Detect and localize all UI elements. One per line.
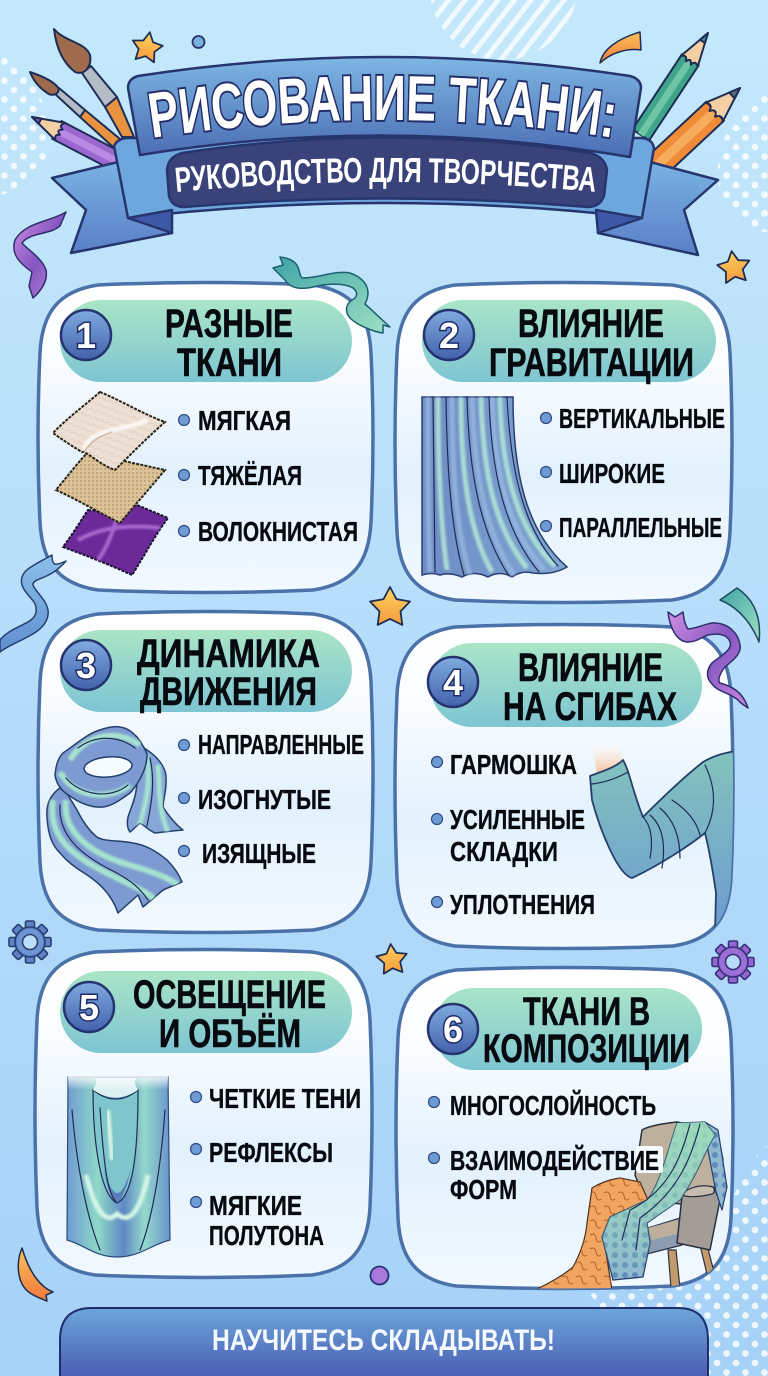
bullet list 6: МНОГОСЛОЙНОСТЬ xyxy=(450,1089,656,1121)
bullet list 6 xyxy=(428,1089,659,1205)
panel 1: types of fabric xyxy=(38,282,373,592)
label backing: white halo xyxy=(636,1146,663,1173)
number badge 5: 5 xyxy=(79,987,99,1028)
stripes circle xyxy=(431,0,576,60)
number badge 3: 3 xyxy=(76,645,96,686)
bullet list 4 xyxy=(432,749,595,920)
number badge 6: 6 xyxy=(443,1009,463,1050)
gear: blue xyxy=(9,921,51,963)
brush: small xyxy=(30,72,120,147)
dot: bottom purple xyxy=(370,1266,388,1284)
bullet list 3: ИЗОГНУТЫЕ xyxy=(198,784,331,815)
banner: fold left xyxy=(128,210,172,233)
bullet list 5: ЧЕТКИЕ ТЕНИ xyxy=(209,1083,361,1114)
bullet list 1 xyxy=(178,405,358,547)
bullet list 5 xyxy=(190,1083,361,1251)
number badge 2 xyxy=(424,310,474,360)
heading 1 xyxy=(165,302,293,385)
heading 4: ВЛИЯНИЕ xyxy=(518,646,663,690)
heading 2: ГРАВИТАЦИИ xyxy=(489,341,694,385)
number badge 1: 1 xyxy=(76,315,96,356)
heading band 5 xyxy=(60,971,352,1053)
dots pattern: left xyxy=(0,50,49,195)
bullet list 3 xyxy=(178,729,364,869)
heading band 3 xyxy=(60,630,352,712)
number badge 2: 2 xyxy=(439,315,459,356)
dot: top blue xyxy=(192,36,204,48)
heading 3: ДИНАМИКА xyxy=(137,632,320,676)
heading band 6 xyxy=(433,988,702,1070)
bullet list 3: НАПРАВЛЕННЫЕ xyxy=(198,729,364,760)
heading 6: КОМПОЗИЦИИ xyxy=(483,1027,690,1071)
number badge 4: 4 xyxy=(443,662,463,703)
number badge 6 xyxy=(428,1004,478,1054)
panel 2: gravity xyxy=(395,282,732,602)
heading 1: ТКАНИ xyxy=(177,341,282,385)
star: center xyxy=(370,587,410,625)
number badge 5 xyxy=(64,982,114,1032)
heading 2: ВЛИЯНИЕ xyxy=(518,302,664,346)
heading 5 xyxy=(133,973,326,1056)
banner: ribbon tail left xyxy=(52,162,172,253)
bullet list 6: ВЗАИМОДЕЙСТВИЕ xyxy=(450,1144,659,1176)
subtitle: РУКОВОДСТВО ДЛЯ ТВОРЧЕСТВА xyxy=(175,158,595,192)
ribbon: purple right xyxy=(668,612,748,708)
star: lower center xyxy=(375,943,408,974)
ribbon: purple left xyxy=(14,212,66,298)
bullet list 6: ФОРМ xyxy=(450,1174,517,1205)
banner: main band xyxy=(128,57,641,157)
panel 5: lighting and volume xyxy=(35,950,372,1278)
panel 6: fabric in composition xyxy=(396,968,733,1290)
crescent: teal right xyxy=(720,588,760,642)
dots pattern: bottom right xyxy=(585,1145,768,1376)
number badge 3 xyxy=(61,640,111,690)
dots pattern: right xyxy=(718,85,768,232)
heading band 4 xyxy=(430,643,702,727)
bullet list 1: ТЯЖЁЛАЯ xyxy=(198,460,302,491)
illustration: draped cloth xyxy=(67,1076,170,1257)
heading 4 xyxy=(503,646,677,729)
pencil: green xyxy=(632,27,716,140)
brush: large xyxy=(54,29,134,137)
heading 5: И ОБЪЁМ xyxy=(159,1012,301,1056)
number badge 1 xyxy=(61,310,111,360)
bullet list 2 xyxy=(540,403,725,543)
illustration: arm with sleeve xyxy=(589,749,733,927)
banner: subtitle band xyxy=(167,138,607,207)
heading 5: ОСВЕЩЕНИЕ xyxy=(133,973,326,1017)
panel 3: motion dynamics xyxy=(38,612,373,932)
crescent: top orange xyxy=(600,32,641,63)
bullet list 1: ВОЛОКНИСТАЯ xyxy=(198,516,358,547)
footer text: НАУЧИТЕСЬ СКЛАДЫВАТЬ! xyxy=(212,1324,555,1357)
star: top left xyxy=(130,30,165,63)
bullet list 4: УСИЛЕННЫЕ xyxy=(450,804,585,835)
heading 1: РАЗНЫЕ xyxy=(165,302,293,346)
banner: fold right xyxy=(596,210,642,233)
pencil: orange xyxy=(646,78,749,177)
pencil: purple xyxy=(27,108,121,170)
heading 2 xyxy=(489,302,694,385)
heading 3: ДВИЖЕНИЯ xyxy=(140,670,317,714)
title: РИСОВАНИЕ ТКАНИ: xyxy=(147,74,616,140)
illustration: fabric swatches xyxy=(53,392,168,575)
bullet list 5: ПОЛУТОНА xyxy=(209,1220,324,1251)
illustration: armchair with throws xyxy=(535,1122,727,1290)
bullet list 2: ШИРОКИЕ xyxy=(559,458,665,489)
bullet list 4: УПЛОТНЕНИЯ xyxy=(450,889,595,920)
footer banner xyxy=(60,1308,708,1376)
banner: ribbon tail right xyxy=(598,162,718,255)
illustration: scarf xyxy=(47,727,183,913)
banner: lower ribbon xyxy=(114,138,654,218)
bullet list 5: МЯГКИЕ xyxy=(209,1190,302,1221)
gear: purple xyxy=(712,941,754,983)
heading 6 xyxy=(483,990,690,1071)
heading band 2 xyxy=(422,300,716,382)
star: top right xyxy=(716,249,752,284)
bullet list 4: ГАРМОШКА xyxy=(450,749,577,780)
number badge 4 xyxy=(428,657,478,707)
heading 6: ТКАНИ В xyxy=(523,990,650,1034)
crescent: bottom left orange xyxy=(18,1248,53,1301)
panel 4: folds xyxy=(395,624,735,950)
bullet list 5: РЕФЛЕКСЫ xyxy=(209,1137,333,1168)
bullet list 3: ИЗЯЩНЫЕ xyxy=(202,838,316,869)
heading 4: НА СГИБАХ xyxy=(503,685,677,729)
bullet list 1: МЯГКАЯ xyxy=(198,405,291,436)
ribbon: blue left xyxy=(0,555,66,652)
ribbon: teal top xyxy=(273,257,390,333)
heading band 1 xyxy=(60,300,352,382)
heading 3 xyxy=(137,632,320,714)
illustration: curtain xyxy=(422,397,567,577)
bullet list 4: СКЛАДКИ xyxy=(450,836,558,867)
